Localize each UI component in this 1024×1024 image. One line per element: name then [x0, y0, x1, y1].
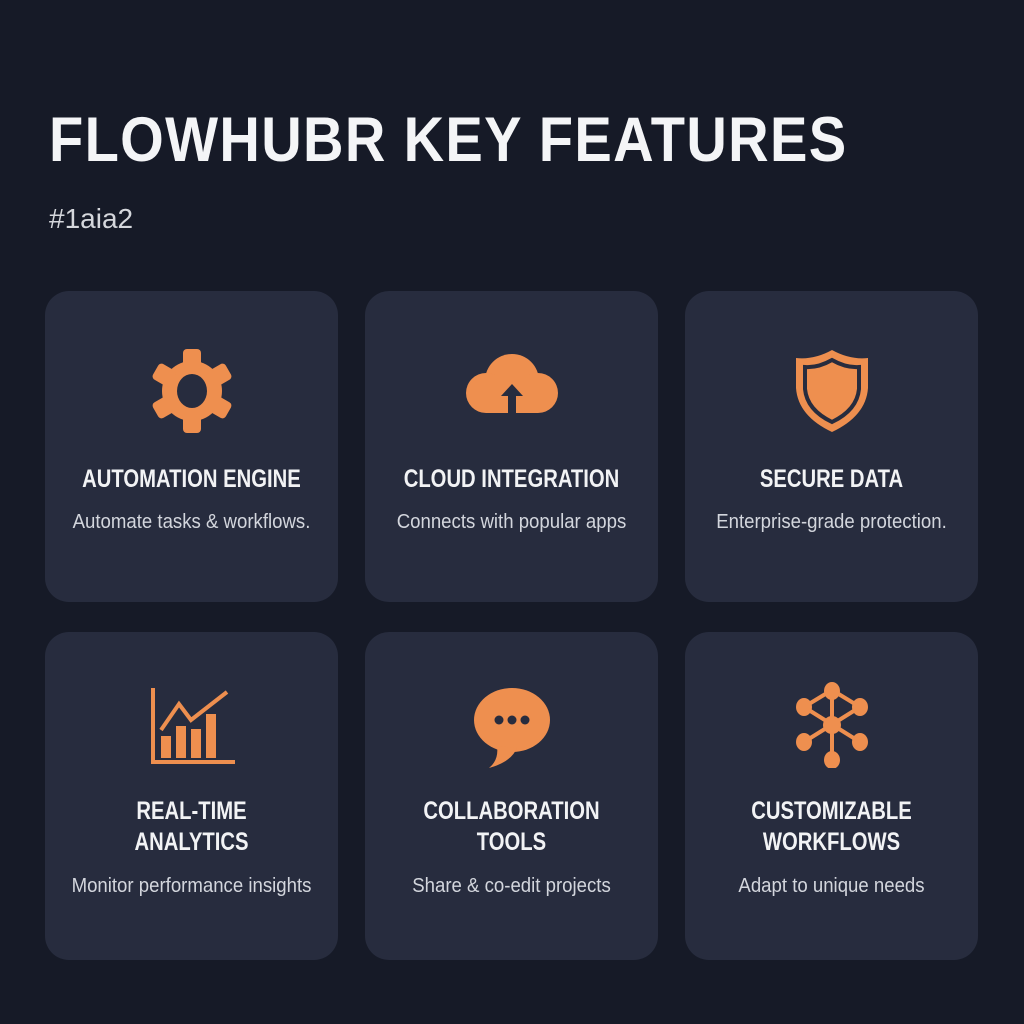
- icon: shield: [796, 350, 868, 432]
- description: Automate tasks & workflows.: [73, 511, 310, 533]
- icon: chart: [151, 688, 235, 764]
- icon: gear: [152, 349, 232, 433]
- panel: secure data: [685, 291, 978, 602]
- panel: real-time analytics: [45, 632, 338, 960]
- subtitle: #1aia2: [49, 203, 133, 234]
- description: Monitor performance insights: [72, 875, 311, 897]
- heading: TOOLS: [477, 828, 546, 856]
- description: Adapt to unique needs: [738, 875, 925, 897]
- panel: cloud integration: [365, 291, 658, 602]
- heading: [751, 797, 912, 856]
- heading: COLLABORATION: [423, 797, 600, 825]
- description: Enterprise-grade protection.: [716, 511, 947, 533]
- heading: WORKFLOWS: [763, 828, 900, 856]
- heading: REAL-TIME: [136, 797, 247, 825]
- heading: SECURE DATA: [760, 465, 903, 493]
- panel: customizable workflows: [685, 632, 978, 960]
- heading: CUSTOMIZABLE: [751, 797, 912, 825]
- heading: [423, 797, 600, 856]
- title: FLOWHUBR KEY FEATURES: [49, 105, 847, 175]
- panel: automation engine: [45, 291, 338, 602]
- icon: chat bubble: [474, 688, 550, 768]
- heading: AUTOMATION ENGINE: [82, 465, 301, 493]
- icon: cloud upload: [466, 354, 558, 413]
- description: Connects with popular apps: [397, 511, 626, 533]
- panel: collaboration tools: [365, 632, 658, 960]
- heading: [134, 797, 249, 856]
- icon: network: [796, 682, 868, 768]
- heading: CLOUD INTEGRATION: [404, 465, 619, 493]
- heading: ANALYTICS: [134, 828, 249, 856]
- description: Share & co-edit projects: [412, 875, 611, 897]
